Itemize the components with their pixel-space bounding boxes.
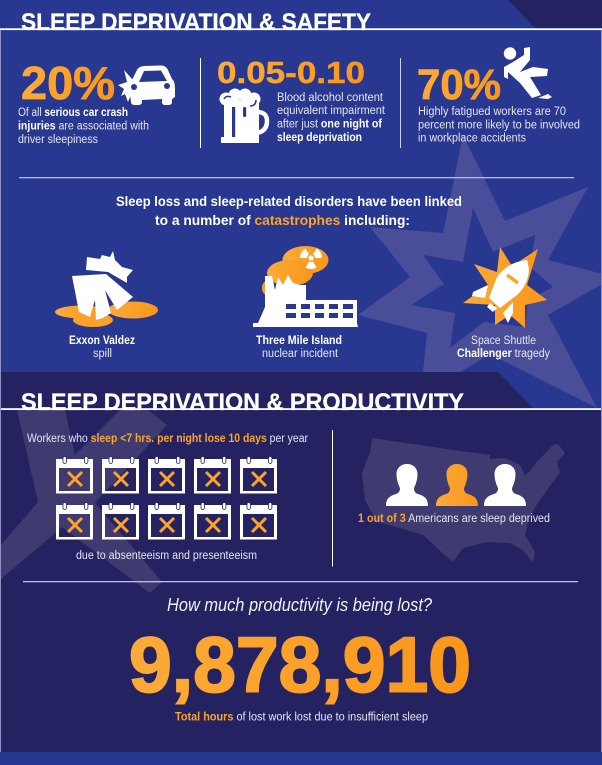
stat: 70 percent: Highly fatigued workers are 70: [418, 106, 566, 118]
label: Challenger: Space Shuttle: [471, 335, 536, 347]
divider: [400, 58, 401, 148]
stat: 70 percent: percent more likely to be involved: [418, 120, 580, 132]
calendar template row one: [56, 456, 93, 494]
stat: 20 percent: 20%: [21, 57, 115, 109]
calendars grid: [56, 456, 277, 540]
label: Three Mile Island: [256, 335, 342, 360]
icon: falling worker: [504, 47, 552, 99]
label: Three Mile Island: nuclear incident: [262, 348, 339, 360]
label: Exxon Valdez: [69, 335, 135, 360]
stat: 20 percent: [18, 57, 149, 146]
stat: blood alcohol: sleep deprivation: [277, 132, 362, 144]
label: Challenger: [457, 335, 550, 360]
background star burst: [358, 135, 602, 408]
stat: 70 percent: 70%: [417, 61, 501, 109]
divider: [200, 58, 201, 148]
map of United States: [362, 438, 565, 563]
stat: blood alcohol: [217, 55, 386, 144]
stat: 70 percent: in workplace accidents: [418, 132, 526, 144]
stat: blood alcohol: Blood alcohol content: [277, 92, 384, 104]
divider: [23, 581, 578, 582]
icon: exploding shuttle: [463, 247, 547, 328]
label: Exxon Valdez: Exxon Valdez: [69, 335, 135, 347]
panel: sleep deprivation and productivity: [0, 372, 601, 752]
heading: productivity: SLEEP DEPRIVATION & PRODUCTIVITY: [21, 389, 464, 416]
caption: Total hours of lost work lost due to insufficient sleep: [175, 712, 428, 724]
divider: [332, 430, 333, 566]
catastrophes intro text: [116, 194, 462, 228]
icon: nuclear plant: [253, 246, 358, 327]
catastrophes intro text: Sleep loss and sleep-related disorders have been linked: [116, 194, 462, 209]
stat: blood alcohol: after just one night of: [277, 118, 382, 130]
stat: blood alcohol: equivalent impairment: [277, 105, 386, 117]
label: Exxon Valdez: spill: [93, 348, 112, 360]
question: How much productivity is being lost?: [167, 595, 432, 615]
dark section background: [1, 372, 601, 752]
stat: blood alcohol: 0.05-0.10: [217, 55, 365, 90]
icon: car crash: [118, 66, 175, 105]
text: one out of three: 1 out of 3 Americans are sleep deprived: [358, 513, 550, 525]
heading: safety: SLEEP DEPRIVATION & SAFETY: [21, 9, 371, 36]
panel: sleep deprivation and safety: [18, 9, 580, 360]
stat: 20 percent: injuries are associated with: [18, 120, 149, 132]
big number: 9,878,910: [129, 620, 471, 708]
label: Three Mile Island: Three Mile Island: [256, 335, 342, 347]
stat: 70 percent: [417, 61, 580, 144]
icon: beer mug: [220, 88, 267, 143]
label: Challenger: Challenger tragedy: [457, 348, 550, 360]
catastrophes intro text: to a number of catastrophes including:: [155, 213, 410, 228]
divider: [19, 177, 574, 178]
top right dark corner: [508, 0, 602, 28]
text: absenteeism: due to absenteeism and presenteeism: [76, 550, 257, 562]
stat: 20 percent: Of all serious car crash: [18, 107, 128, 119]
text: workers lose days: Workers who sleep <7 hrs. per night lose 10 days per year: [27, 433, 308, 445]
background star lower part: [0, 410, 167, 593]
icon: oil tanker spill: [55, 251, 158, 327]
stat: 20 percent: driver sleepiness: [18, 134, 98, 146]
icons: three people: [386, 464, 526, 506]
